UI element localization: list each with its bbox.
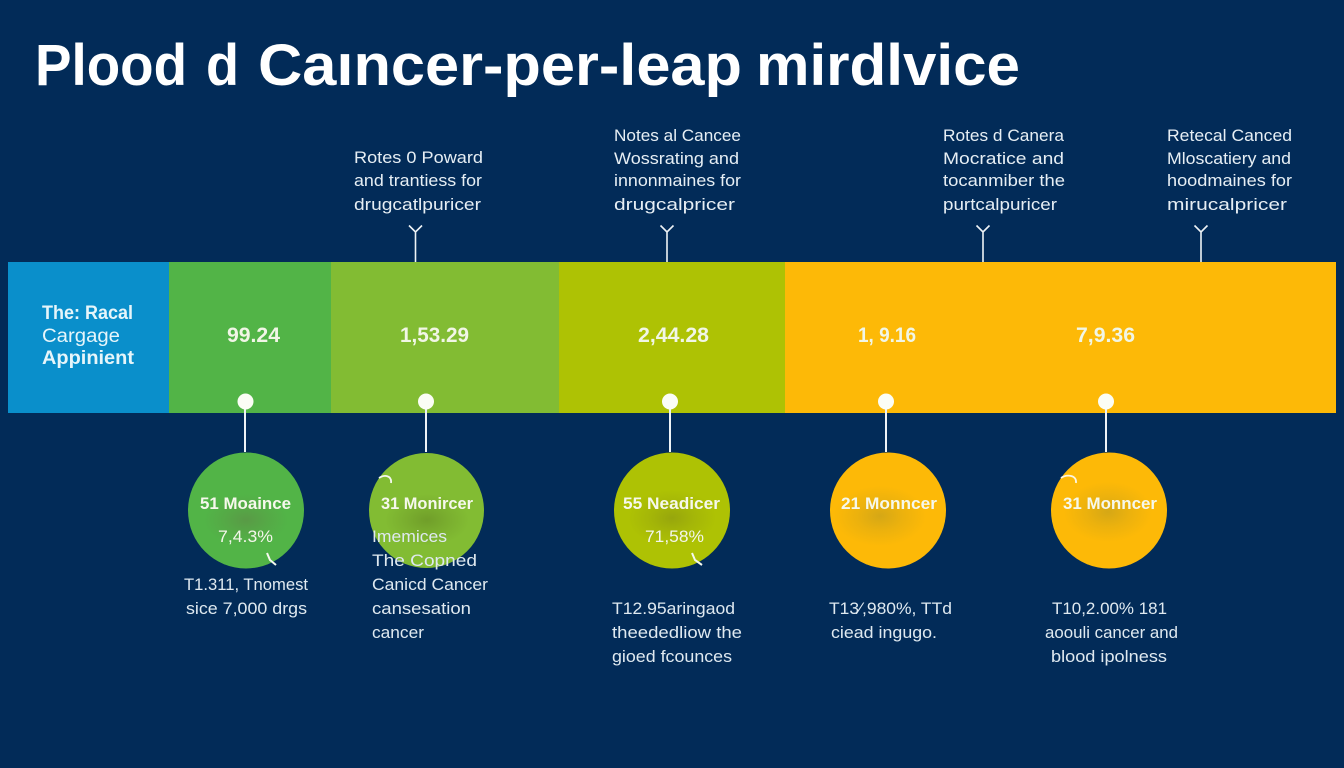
- title: [35, 33, 1020, 98]
- segment: green: 99.24: [227, 324, 280, 347]
- connector and dot: [238, 394, 254, 452]
- segment: amber: [785, 262, 1336, 413]
- segment: green: [169, 262, 331, 413]
- connector: note 4: [1194, 226, 1208, 262]
- description: [829, 600, 952, 642]
- description: T1.311, Tnomest: [184, 576, 308, 594]
- description: theededliow the: [612, 624, 742, 642]
- note 3 above bar: Rotes d Canera: [943, 127, 1065, 145]
- connector and dot: [1098, 394, 1114, 452]
- circle label: 51 Moaince: [200, 494, 291, 513]
- circle label: 21 Monncer: [841, 494, 937, 513]
- note 2 above bar: Wossrating and: [614, 150, 739, 168]
- note 4 above bar: Retecal Canced: [1167, 127, 1292, 145]
- connector: note 2: [660, 226, 674, 262]
- circle value: 71,58%: [645, 527, 704, 546]
- segment: blue label: [8, 262, 169, 413]
- note 2 above bar: [614, 127, 742, 214]
- description: [1045, 600, 1178, 666]
- segment: amber: 7,9.36: [1076, 324, 1135, 347]
- title: mirdlvice: [756, 33, 1020, 98]
- milestone 4: [829, 394, 952, 642]
- segment: amber: 1, 9.16: [858, 324, 916, 347]
- note 1 above bar: and trantiess for: [354, 172, 483, 190]
- segment: light green: 1,53.29: [400, 324, 469, 347]
- connector and dot: [418, 394, 434, 452]
- description: T10,2.00% 181: [1052, 600, 1167, 618]
- icon: curl mark: [1061, 476, 1076, 483]
- description: cancer: [372, 624, 425, 642]
- icon: curl mark: [379, 476, 391, 483]
- description: Canicd Cancer: [372, 576, 489, 594]
- circle: [614, 452, 730, 568]
- connector: note 1: [409, 226, 422, 262]
- note 4 above bar: [1167, 127, 1293, 214]
- note 3 above bar: tocanmiber the: [943, 172, 1065, 190]
- circle label: 55 Neadicer: [623, 494, 720, 513]
- circle label: 31 Monircer: [381, 494, 473, 513]
- note 4 above bar: hoodmaines for: [1167, 172, 1293, 190]
- milestone 1: [184, 394, 308, 618]
- description: ciead ingugo.: [831, 624, 937, 642]
- segment: lime: 2,44.28: [638, 324, 709, 347]
- description: blood ipolness: [1051, 648, 1167, 666]
- note 2 above bar: Notes al Cancee: [614, 127, 741, 145]
- note 1 above bar: Rotes 0 Poward: [354, 149, 483, 167]
- note 1 above bar: drugcatlpuricer: [354, 196, 482, 214]
- icon: tick mark: [267, 553, 276, 565]
- timeline bar: [8, 262, 1336, 413]
- note 1 above bar: [354, 149, 483, 214]
- description: sice 7,000 drgs: [186, 600, 307, 618]
- title: Plood: [35, 33, 187, 98]
- note 4 above bar: mirucalpricer: [1167, 196, 1288, 214]
- segment: blue label: The: Racal: [42, 303, 133, 324]
- note 4 above bar: Mloscatiery and: [1167, 150, 1291, 168]
- description: T12.95aringaod: [612, 600, 735, 618]
- connector and dot: [878, 394, 894, 452]
- circle: [369, 453, 484, 568]
- description: [184, 576, 308, 618]
- description: aoouli cancer and: [1045, 624, 1178, 642]
- description: gioed fcounces: [612, 648, 732, 666]
- segment: blue label: Cargage: [42, 326, 120, 347]
- description: T13⁄,980%, TTd: [829, 600, 952, 618]
- title: Caıncer-per-leap: [258, 33, 742, 98]
- connector and dot: [662, 394, 678, 452]
- connector: note 3: [976, 226, 990, 262]
- milestone 2: [369, 394, 489, 642]
- circle: [188, 452, 304, 568]
- description: cansesation: [372, 600, 471, 618]
- icon: tick mark: [692, 553, 702, 565]
- segment: lime: [559, 262, 785, 413]
- note 3 above bar: purtcalpuricer: [943, 196, 1058, 214]
- segment: blue label: Appinient: [42, 348, 135, 369]
- milestone 3: [612, 394, 742, 666]
- description: [372, 528, 489, 642]
- segment: light green: [331, 262, 559, 413]
- description: Imemices: [372, 528, 447, 546]
- circle label: 31 Monncer: [1063, 494, 1157, 513]
- note 2 above bar: drugcalpricer: [614, 196, 736, 214]
- circle value: 7,4.3%: [218, 527, 273, 546]
- note 2 above bar: innonmaines for: [614, 172, 742, 190]
- description: The Copned: [372, 552, 477, 570]
- circle: [1051, 452, 1167, 568]
- milestone 5: [1045, 394, 1178, 666]
- note 3 above bar: Mocratice and: [943, 150, 1064, 168]
- note 3 above bar: [943, 127, 1065, 214]
- description: [612, 600, 742, 666]
- title: d: [206, 33, 239, 98]
- circle: [830, 452, 946, 568]
